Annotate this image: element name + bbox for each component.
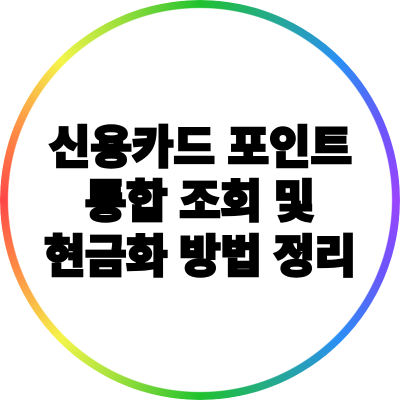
title line 2: 통합 조회 및 xyxy=(85,176,315,227)
title line 1: 신용카드 포인트 xyxy=(49,122,352,173)
title line 3: 현금화 방법 정리 xyxy=(44,231,356,282)
